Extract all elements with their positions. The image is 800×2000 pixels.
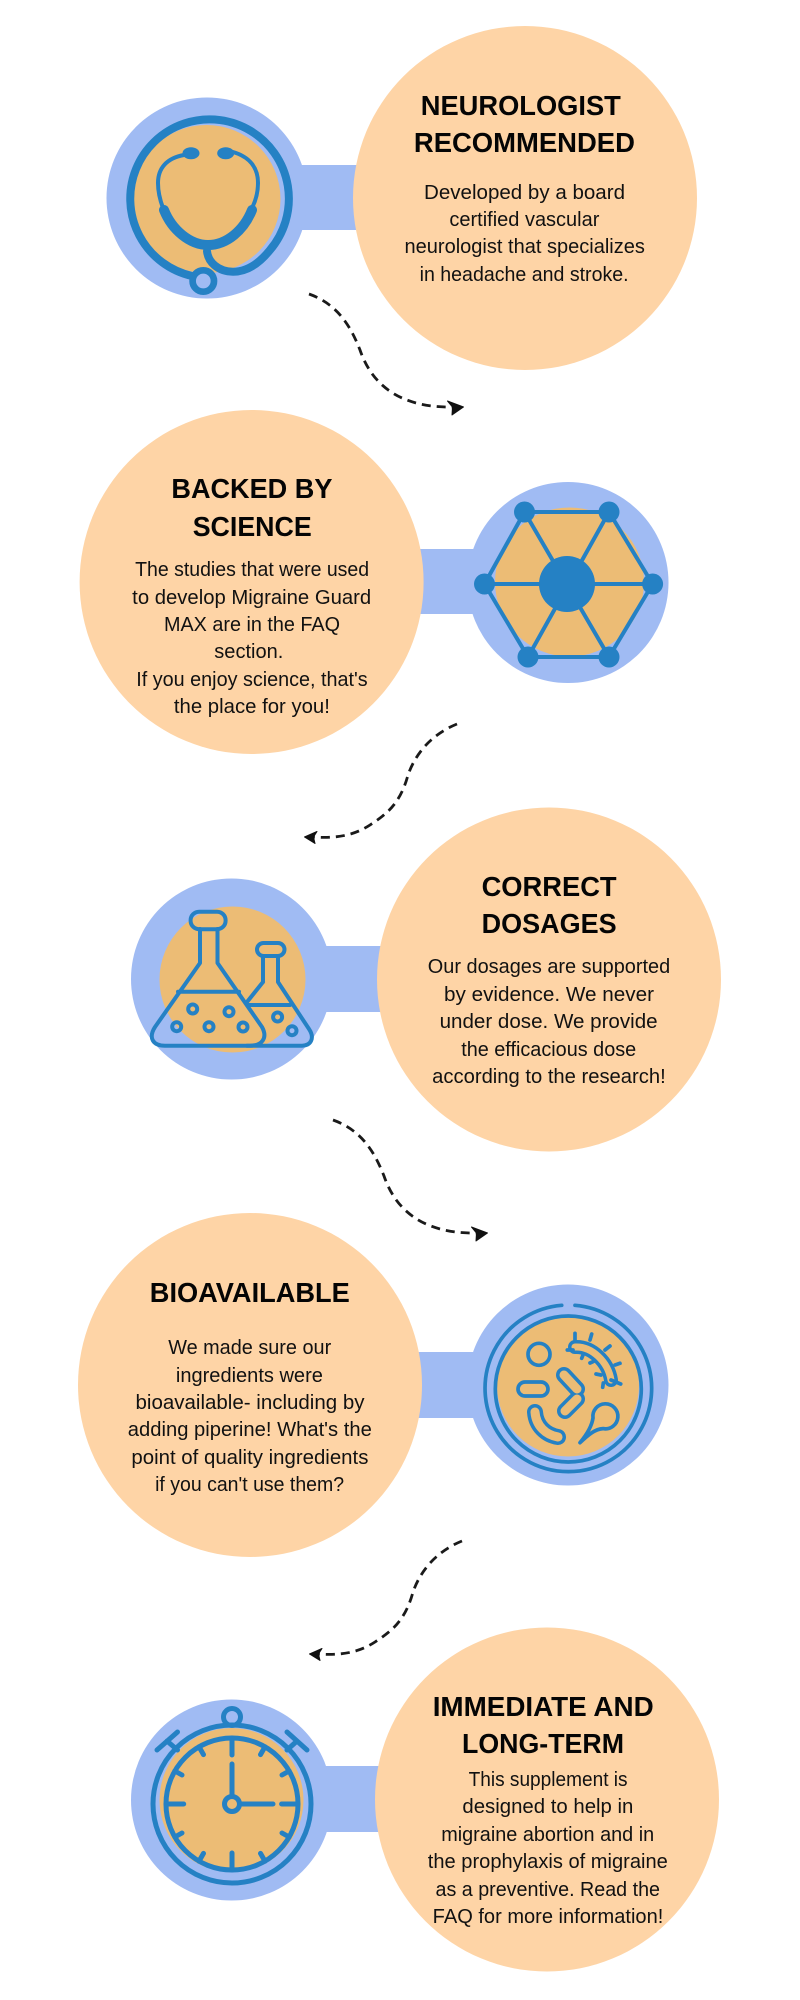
body text: adding piperine! What's the	[128, 1419, 372, 1441]
panel: neurologist recommended	[106, 26, 697, 370]
icon: stethoscope	[130, 119, 289, 292]
body text: to develop Migraine Guard	[132, 587, 371, 609]
body text: This supplement is	[469, 1769, 628, 1791]
text circle	[377, 808, 721, 1152]
connector bar	[400, 1352, 520, 1418]
connector bar	[310, 1766, 430, 1832]
body text: Our dosages are supported	[428, 956, 670, 978]
body text: section.	[214, 641, 283, 663]
heading: BACKED BY	[171, 473, 333, 504]
connector bar	[400, 549, 520, 614]
body text: the prophylaxis of migraine	[428, 1851, 668, 1873]
body text: If you enjoy science, that's	[136, 669, 368, 691]
body text: in headache and stroke.	[420, 264, 629, 286]
icon disc	[468, 482, 668, 683]
panel: correct dosages	[131, 808, 721, 1152]
body text: the place for you!	[174, 696, 330, 718]
arrow: step 2 to step 3	[304, 724, 457, 844]
icon: stopwatch	[153, 1708, 311, 1883]
body text: bioavailable- including by	[136, 1392, 364, 1414]
arrow: step 4 to step 5	[310, 1541, 462, 1660]
body text: migraine abortion and in	[441, 1824, 654, 1846]
icon: molecular hexagon	[474, 502, 663, 668]
heading: LONG-TERM	[462, 1728, 624, 1759]
icon disc	[131, 1700, 332, 1900]
arrow: step 1 to step 2	[309, 294, 464, 415]
body text: as a preventive. Read the	[436, 1879, 660, 1901]
body text: certified vascular	[449, 209, 600, 231]
heading: IMMEDIATE AND	[433, 1691, 654, 1722]
heading: DOSAGES	[482, 908, 617, 939]
body text	[428, 1769, 668, 1928]
body text	[404, 182, 645, 286]
body text: point of quality ingredients	[131, 1447, 368, 1469]
connector bar	[290, 165, 410, 230]
heading: SCIENCE	[193, 511, 312, 542]
heading	[482, 871, 617, 939]
body text: FAQ for more information!	[433, 1906, 663, 1928]
text circle	[80, 410, 424, 754]
body text	[132, 559, 371, 718]
icon disc	[106, 98, 308, 298]
body text: according to the research!	[432, 1066, 666, 1088]
panel: immediate and long-term	[131, 1628, 719, 1972]
icon: lab flasks	[152, 906, 312, 1052]
body text: We made sure our	[168, 1337, 332, 1359]
body text: neurologist that specializes	[404, 236, 645, 258]
body text	[428, 956, 670, 1088]
icon disc	[468, 1284, 668, 1486]
heading: BIOAVAILABLE	[150, 1277, 350, 1308]
body text: the efficacious dose	[461, 1039, 636, 1061]
body text: Developed by a board	[424, 182, 625, 204]
body text: under dose. We provide	[440, 1011, 658, 1033]
panel: bioavailable	[78, 1213, 668, 1557]
heading	[433, 1691, 654, 1759]
body text: MAX are in the FAQ	[164, 614, 340, 636]
body text	[128, 1337, 372, 1496]
text circle	[353, 26, 697, 370]
body text: designed to help in	[462, 1796, 633, 1818]
text circle	[375, 1628, 719, 1972]
connector bar	[310, 946, 430, 1012]
body text: ingredients were	[176, 1365, 323, 1387]
icon disc	[131, 878, 332, 1080]
heading: NEUROLOGIST	[421, 90, 621, 121]
panel: backed by science	[80, 410, 669, 754]
body text: by evidence. We never	[444, 984, 654, 1006]
arrow: step 3 to step 4	[333, 1120, 488, 1241]
heading: CORRECT	[482, 871, 617, 902]
heading	[171, 473, 333, 542]
heading: RECOMMENDED	[414, 127, 635, 158]
text circle	[78, 1213, 422, 1557]
body text: if you can't use them?	[155, 1474, 344, 1496]
icon: petri dish with bacteria	[485, 1305, 652, 1472]
heading	[414, 90, 635, 158]
body text: The studies that were used	[135, 559, 369, 581]
